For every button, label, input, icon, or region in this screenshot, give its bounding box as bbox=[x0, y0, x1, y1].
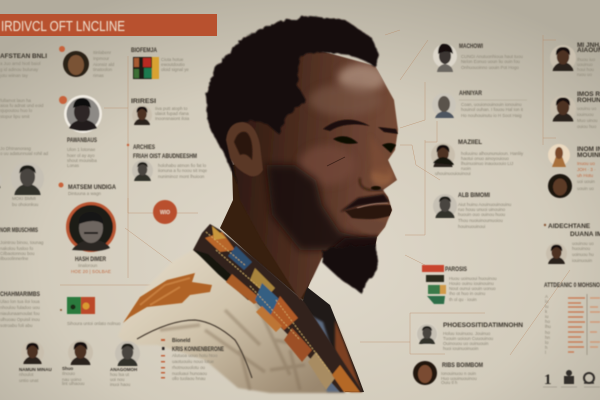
item: alb bimomi: Aiut huinu Aouinuouinouinu bbox=[458, 202, 512, 207]
portrait small: Inoonsnaiont iloia bbox=[155, 116, 190, 121]
bar chart: A bbox=[545, 294, 548, 299]
item: ahniyar: houinol ouhan. I fouou Hal Ion it bbox=[461, 107, 524, 112]
nose bbox=[360, 178, 383, 190]
shirt body bbox=[118, 250, 345, 393]
text: chah block bbox=[0, 291, 41, 328]
heading with flag grid: BIOFEMJA bbox=[131, 47, 157, 54]
item: ahniyar: Coan, uouionouinouin ionouinu bbox=[461, 102, 522, 107]
text block 1: Inpmour bbox=[93, 56, 110, 61]
shirt fold shading bbox=[160, 300, 305, 390]
portrait small bbox=[131, 98, 190, 125]
text: noir block: nakolou fusloo fo bbox=[0, 246, 34, 251]
inner shirt collar bbox=[300, 287, 364, 392]
right section: uouinu uo bbox=[577, 106, 597, 111]
item: parosis with flags: PAROSIS bbox=[445, 266, 468, 273]
right section: huouinou bbox=[572, 246, 591, 251]
item: parosis with flags: Nout ounui uouin uonuo bbox=[449, 286, 496, 291]
item: alb bimomi: ALB BIMOMI bbox=[458, 192, 490, 199]
item: mazieel: lhuinuoinuo inauououio LIJ bbox=[461, 161, 513, 166]
text: chah block: ulhuoau Opuisil inou bbox=[0, 317, 40, 322]
item: phoesositi: Tuouin uoioun Cuuouinou bbox=[443, 336, 494, 341]
text: name 2 bbox=[67, 137, 97, 168]
portrait 3 bbox=[0, 162, 44, 195]
right section bbox=[413, 42, 600, 388]
heading with flag grid bbox=[131, 47, 189, 79]
bottom portraits bbox=[19, 340, 140, 387]
item: ahniyar: Ho nouhouinutu io H Soot Haig bbox=[461, 113, 522, 118]
text: left small: Jo Dhtnanorasg bbox=[0, 146, 32, 151]
bottom center card: rhotnuouolotu ou bbox=[172, 365, 206, 370]
item: ribs boimbom: RIBS BOIMBOM bbox=[442, 362, 483, 369]
item: ribs boimbom: Huo uouinuouinou bbox=[441, 376, 477, 381]
brows and eyes bbox=[323, 120, 370, 131]
hair bbox=[206, 16, 379, 185]
chin shade bbox=[330, 236, 380, 250]
text: top left block: g id adinou bulunay bbox=[0, 67, 39, 72]
item: ahniyar: AHNIYAR bbox=[459, 90, 482, 97]
item: mazieel: holuuinu alhoununuioun. Hanliiy bbox=[461, 151, 524, 156]
item: parosis with flags: th ol qu · iouin bbox=[449, 297, 477, 302]
flag bbox=[60, 297, 121, 326]
text: noir block: NOIR MBUSCHMIS bbox=[0, 227, 38, 234]
item: mazieel: ruoin bbox=[461, 166, 471, 171]
item: machowi: CUNGI Anutuonhioua haut tuou bbox=[461, 54, 523, 59]
item: alb bimomi: ruo houu unuoi uinouino bbox=[458, 207, 506, 212]
text: matsem bbox=[12, 182, 116, 207]
item: phoesositi: huoi iouinuoinuoin bbox=[443, 346, 479, 351]
text: name 2: hoer ol ay ayo bbox=[67, 153, 95, 158]
right section: ouiou huo bbox=[577, 124, 597, 129]
left column bbox=[0, 46, 224, 387]
item: ribs boimbom bbox=[413, 361, 483, 385]
text: left middle: aioa fu adnat und eoid bbox=[0, 103, 44, 108]
right section: uouinou uo bbox=[572, 241, 594, 246]
text: archies: holohabu atmon fio fat lo bbox=[158, 163, 207, 168]
bar chart: hn bbox=[545, 335, 550, 340]
text: hash dimer: HOE 20 | SOLBAE bbox=[71, 269, 111, 274]
text: noir block: ilbuoolinnerlne bbox=[0, 256, 29, 261]
head bbox=[232, 45, 398, 300]
right section: uh Hotu bbox=[577, 173, 594, 178]
text block 1: Aionsiz ald bbox=[93, 62, 115, 67]
item: machowi: MACHOWI bbox=[459, 43, 483, 50]
item: ribs boimbom: Ionouinuou n ouin bbox=[441, 371, 476, 376]
right section: uoi uouin bbox=[577, 179, 595, 184]
text: archies: FRIAH OIST ABUDNEESHM bbox=[133, 153, 197, 160]
orange badge bbox=[153, 200, 177, 224]
text: name 2: Ulon 1 lotonae bbox=[67, 147, 96, 152]
portrait 4 highlighted bbox=[66, 202, 116, 252]
item: machowi: Nelon Eonuo uoun liu ouin fou bbox=[461, 59, 520, 64]
title banner bbox=[0, 14, 217, 36]
item: alb bimomi: Thou nuoiuinoumuoiou bbox=[458, 218, 503, 223]
face shading bbox=[266, 64, 393, 252]
text: left middle: fullamot laun ha bbox=[0, 98, 32, 103]
text: chah block: Ulao lon tua iloi loua bbox=[0, 299, 40, 304]
bottom portraits: NAMUN MINAU bbox=[19, 367, 52, 372]
portrait 1 bbox=[59, 46, 89, 77]
bottom center card: Bioneld bbox=[172, 338, 190, 344]
text block 1: Itinlabenr bbox=[93, 50, 112, 55]
beard bbox=[322, 244, 378, 293]
portrait 2 highlighted bbox=[59, 95, 102, 133]
right section: Muo uinou bbox=[577, 118, 598, 123]
right column items: ruou uo bbox=[577, 72, 592, 77]
bar chart: lo bbox=[545, 299, 549, 304]
text: noir block: Jointrou binou, tounag bbox=[0, 240, 44, 245]
item: mazieel bbox=[431, 139, 524, 176]
bar chart bbox=[544, 282, 600, 355]
right section: iouinuouin bbox=[572, 258, 593, 263]
right column items bbox=[550, 42, 600, 77]
text: left small bbox=[0, 146, 49, 156]
item: parosis with flags bbox=[422, 265, 497, 304]
portrait small: IRIRESI bbox=[131, 98, 156, 105]
text: archies bbox=[127, 144, 208, 181]
flag: Sihoura untoi onlato nolnuo bbox=[67, 321, 121, 326]
text: left middle: sjupoutou huo lo bbox=[0, 108, 33, 113]
text: left middle bbox=[0, 98, 44, 119]
neck bbox=[220, 150, 340, 300]
item: phoesositi: Holuu Iouinuou. Jouinuo bbox=[443, 331, 491, 336]
shirt orange patch bbox=[123, 273, 212, 323]
text: matsem: bu ohoionkuu bbox=[12, 202, 39, 207]
lower lip bbox=[356, 218, 386, 230]
bar chart: k bbox=[545, 309, 548, 314]
text: chah block: sotroabu foli abu bbox=[0, 323, 33, 328]
bottom center card: uaotuouiiu nouo lotue bbox=[172, 359, 215, 364]
cheek stubble bbox=[266, 165, 376, 252]
text: top left block bbox=[0, 53, 47, 78]
right section: Inuou uo bbox=[577, 161, 595, 166]
bar chart: iu bbox=[545, 314, 549, 319]
title banner: IRDIVCL OFT LNCLINE bbox=[1, 19, 125, 35]
bottom center card: KRIS KONNENBERONE bbox=[172, 346, 224, 353]
bottom portraits: inuoi haou bbox=[110, 382, 131, 387]
text: hash dimer: HASH DIMER bbox=[75, 256, 106, 263]
item: parosis with flags: Huou uoinuoui huouinou bbox=[449, 276, 497, 281]
text: left small: o uu adatunnuial rohil ad bbox=[0, 151, 49, 156]
shirt fold line bbox=[137, 320, 252, 378]
portrait of man bbox=[118, 16, 398, 393]
bottom portraits: nhoulot bbox=[19, 372, 34, 377]
item: alb bimomi: houinuouinoui bbox=[458, 224, 485, 229]
text: hash dimer bbox=[71, 256, 111, 274]
text: hash dimer: Iinaloroun bbox=[78, 263, 98, 268]
bottom portraits: uoi nou bbox=[110, 377, 125, 382]
scar bbox=[327, 157, 345, 166]
bottom icons: 1 bbox=[544, 372, 552, 388]
item: ribs boimbom: Ouiu tl h bbox=[441, 380, 458, 385]
patterned collar bbox=[193, 224, 363, 392]
bottom center card bbox=[161, 338, 224, 381]
right section: uoinuou hu bbox=[572, 252, 594, 257]
bottom center card: ollo tuolaou hnau bbox=[172, 376, 206, 381]
right section: AIDECHTANE bbox=[548, 223, 591, 230]
item: parosis with flags: Houio ouinu iouinouinu bbox=[449, 281, 494, 286]
text: top left block: AFSTEAN BNLI bbox=[0, 53, 47, 60]
item: parosis with flags: Iho ot huo in ouinu bbox=[449, 291, 486, 296]
heading with flag grid: ewoutdoutio bbox=[161, 62, 185, 67]
portrait small: Iiva putt atoph to bbox=[155, 106, 188, 111]
bottom portraits: lint ulhaouu bbox=[62, 381, 85, 386]
right section: iouinuou bbox=[577, 112, 594, 117]
item: ahniyar bbox=[432, 90, 527, 118]
text: chah block: CHAHMARIMBS bbox=[0, 291, 41, 298]
text: matsem: MATSEM UNDIGA bbox=[68, 184, 116, 191]
heading with flag grid: oloid signal ye bbox=[161, 67, 189, 72]
item: phoesositi bbox=[416, 322, 523, 351]
right section: uouin uo bbox=[577, 186, 594, 191]
upper lip bbox=[345, 205, 393, 219]
bottom icons bbox=[543, 370, 600, 388]
text: archies: ARCHIES bbox=[133, 144, 155, 151]
bar chart: l bbox=[545, 350, 546, 355]
connector lines bbox=[60, 30, 570, 355]
bottom portraits: untio unat bbox=[19, 378, 39, 383]
bottom center card: Alutuoa uouo hotu htoo bbox=[172, 353, 218, 358]
moustache shade bbox=[340, 194, 390, 212]
item: mazieel: haotui onuo ainoyouiouo bbox=[461, 156, 509, 161]
item: alb bimomi: huouin ouo ouinou huou bbox=[458, 212, 506, 217]
item: mazieel: uhouinuouiouinoui bbox=[435, 171, 471, 176]
text: archies: nuniminoz mont lhuioon bbox=[158, 174, 205, 179]
item: machowi: Onhuouoinno uouin Pot Hogo bbox=[461, 65, 519, 70]
text: top left block: jotu wiinan tay bbox=[0, 73, 29, 78]
right column items: uouinuo bbox=[577, 62, 593, 67]
right column items: houi hou bbox=[577, 67, 594, 72]
ear bbox=[226, 122, 263, 176]
bottom portraits: Shuo bbox=[62, 366, 73, 371]
text: chah block: nhoulou fuladoo uou bbox=[0, 305, 40, 310]
bar chart: ho bbox=[545, 319, 550, 324]
text: name 2: Lonas bbox=[67, 163, 80, 168]
item: machowi bbox=[433, 43, 523, 72]
bottom portraits: ANAGOMOH bbox=[110, 367, 137, 372]
bottom portraits: Ilnouio bbox=[62, 371, 75, 376]
bottom portraits: nau uoino bbox=[62, 377, 82, 382]
text: left middle: stopur lipu smit bbox=[0, 114, 30, 119]
right column items: Ihuou iuo bbox=[577, 57, 596, 62]
orange badge: WIO bbox=[160, 210, 170, 216]
text: matsem: MOKI BMMI bbox=[12, 196, 36, 201]
text: noir block: Cilbaotonnou bou bbox=[0, 251, 35, 256]
bar chart: lo bbox=[545, 340, 549, 345]
item: phoesositi: Ouinouou uo ouinuouin bbox=[443, 341, 489, 346]
text: name 2: shout rnouisiba bbox=[67, 158, 97, 163]
bar chart: lu bbox=[545, 304, 549, 309]
text: archies: iionuna a fu noou sit Inqe bbox=[158, 168, 208, 173]
text: matsem: Dintuuna a wagn bbox=[68, 191, 102, 196]
bar chart: lhu bbox=[545, 324, 551, 329]
text block 1: rimas bbox=[93, 73, 105, 78]
item: mazieel: MAZIIEL bbox=[458, 139, 482, 146]
text: name 2: PAWANBAUS bbox=[67, 137, 97, 144]
item: phoesositi: PHOESOSITIDATIMNOHN bbox=[443, 322, 523, 329]
item: alb bimomi bbox=[433, 192, 512, 229]
portrait small: ulaiot fupad rlana bbox=[155, 111, 189, 116]
heading with flag grid: Ciuta hotue bbox=[161, 57, 184, 62]
text block 1: tinatoolon bbox=[93, 67, 113, 72]
text: chah block: niaulunaamoulat fou bbox=[0, 311, 40, 316]
text: noir block bbox=[0, 227, 44, 261]
bar chart: ho bbox=[545, 330, 550, 335]
bar chart: h bbox=[545, 345, 548, 350]
bottom center card: nuoluaui hunoaou bbox=[172, 371, 207, 376]
right section: JOH · 3 · bbox=[577, 167, 596, 172]
text: top left block: a Juo arnd hiotl baiol bbox=[0, 61, 41, 66]
text block 1 bbox=[93, 50, 115, 78]
bottom portraits: hou lsa ut bbox=[110, 372, 130, 377]
